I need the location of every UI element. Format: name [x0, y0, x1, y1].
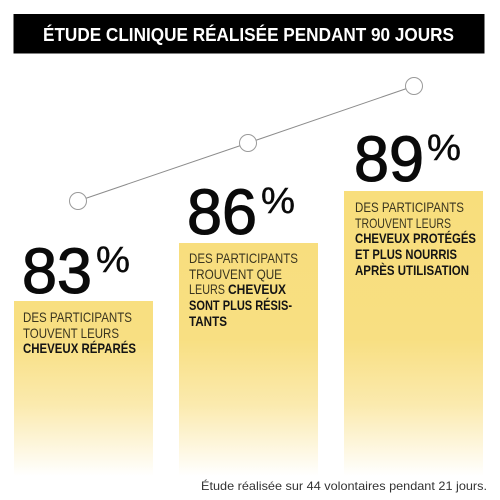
bar 1	[14, 301, 153, 476]
text block 3: DES PARTICIPANTS	[355, 199, 464, 215]
trend line with markers	[70, 78, 422, 210]
statistic: 83%	[22, 235, 130, 307]
statistic: 86%	[187, 176, 295, 248]
statistic: 89%	[354, 123, 461, 195]
text block 2: SONT PLUS RÉSIS-	[189, 297, 292, 313]
footnote: Étude réalisée sur 44 volontaires pendant 21 jours.	[201, 478, 487, 493]
statistic: 83%: 83	[22, 235, 92, 307]
title banner	[14, 14, 484, 54]
text block 2: CHEVEUX	[228, 281, 287, 297]
text block 1: DES PARTICIPANTS	[23, 309, 132, 325]
statistic: 89%: 89	[354, 123, 424, 195]
text block 3: ET PLUS NOURRIS	[355, 246, 457, 262]
text block 1: CHEVEUX RÉPARÉS	[23, 340, 136, 356]
text block 1	[23, 309, 136, 356]
bar 2	[179, 243, 318, 476]
text block 1: TOUVENT LEURS	[23, 325, 119, 341]
text block 3: APRÈS UTILISATION	[355, 262, 469, 278]
statistic: 86%: 86	[187, 176, 257, 248]
panel: 86 percent	[179, 176, 318, 476]
text block 3: CHEVEUX PROTÉGÉS	[355, 230, 476, 246]
text block 2: LEURS	[189, 281, 225, 297]
text block 3	[355, 199, 476, 278]
statistic: 86%: %	[261, 180, 295, 221]
text block 2	[189, 250, 298, 329]
statistic: 83%: %	[96, 239, 130, 280]
panel: 89 percent	[344, 123, 483, 476]
statistic: 89%: %	[427, 127, 461, 168]
text block 2: TROUVENT QUE	[189, 266, 282, 282]
panel: 83 percent	[14, 235, 153, 476]
text block 2: TANTS	[189, 313, 227, 329]
title banner: ÉTUDE CLINIQUE RÉALISÉE PENDANT 90 JOURS	[43, 24, 454, 45]
bar 3	[344, 191, 483, 476]
text block 2: DES PARTICIPANTS	[189, 250, 298, 266]
text block 3: TROUVENT LEURS	[355, 215, 451, 231]
